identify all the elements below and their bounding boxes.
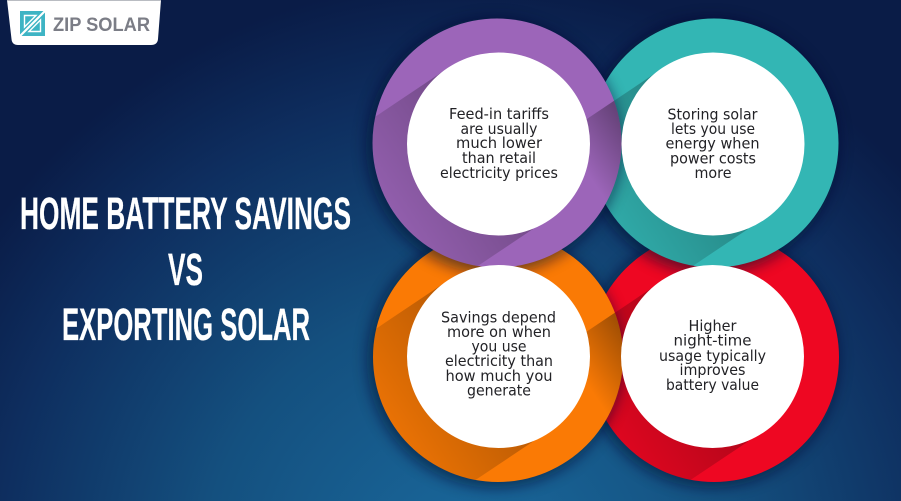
ring: purple	[362, 17, 627, 278]
panel: storing solar	[622, 52, 804, 236]
panel: savings depend: generate	[467, 382, 531, 400]
logo wordmark: ZIP SOLAR	[53, 14, 150, 36]
panel: savings depend	[407, 265, 590, 448]
ring: orange	[360, 248, 628, 495]
panel: savings depend: you use	[472, 337, 526, 355]
panel: savings depend: electricity than	[445, 352, 553, 370]
title: HOME BATTERY SAVINGS	[20, 188, 351, 239]
ring: red	[600, 248, 843, 494]
panel: higher night-time usage: usage typically	[659, 347, 766, 365]
panel: feed-in tariffs: Feed-in tariffs	[449, 105, 549, 123]
title: VS	[168, 244, 203, 295]
panel: storing solar: power costs	[670, 149, 756, 167]
panel: storing solar: more	[694, 164, 732, 182]
panel: feed-in tariffs: are usually	[460, 120, 538, 138]
panel: feed-in tariffs	[407, 52, 590, 236]
title: EXPORTING SOLAR	[62, 299, 310, 350]
panel: storing solar: Storing solar	[668, 105, 758, 123]
icon: zip solar mark	[20, 11, 45, 36]
ring: teal	[600, 18, 840, 276]
panel: higher night-time usage: improves	[680, 361, 746, 379]
panel: savings depend: how much you	[446, 367, 552, 385]
panel: feed-in tariffs: much lower	[456, 134, 543, 152]
panel: higher night-time usage: night-time	[674, 332, 752, 350]
panel: higher night-time usage: battery value	[666, 376, 759, 394]
panel: storing solar: energy when	[666, 134, 760, 152]
panel: feed-in tariffs: than retail	[462, 149, 536, 167]
title	[20, 188, 351, 350]
panel: feed-in tariffs: electricity prices	[440, 164, 558, 182]
panel: savings depend: more on when	[447, 323, 551, 341]
logo tab	[7, 0, 161, 45]
panel: savings depend: Savings depend	[441, 308, 556, 326]
panel: storing solar: lets you use	[671, 120, 755, 138]
panel: higher night-time usage: Higher	[688, 317, 737, 335]
panel: higher night-time usage	[621, 265, 804, 448]
